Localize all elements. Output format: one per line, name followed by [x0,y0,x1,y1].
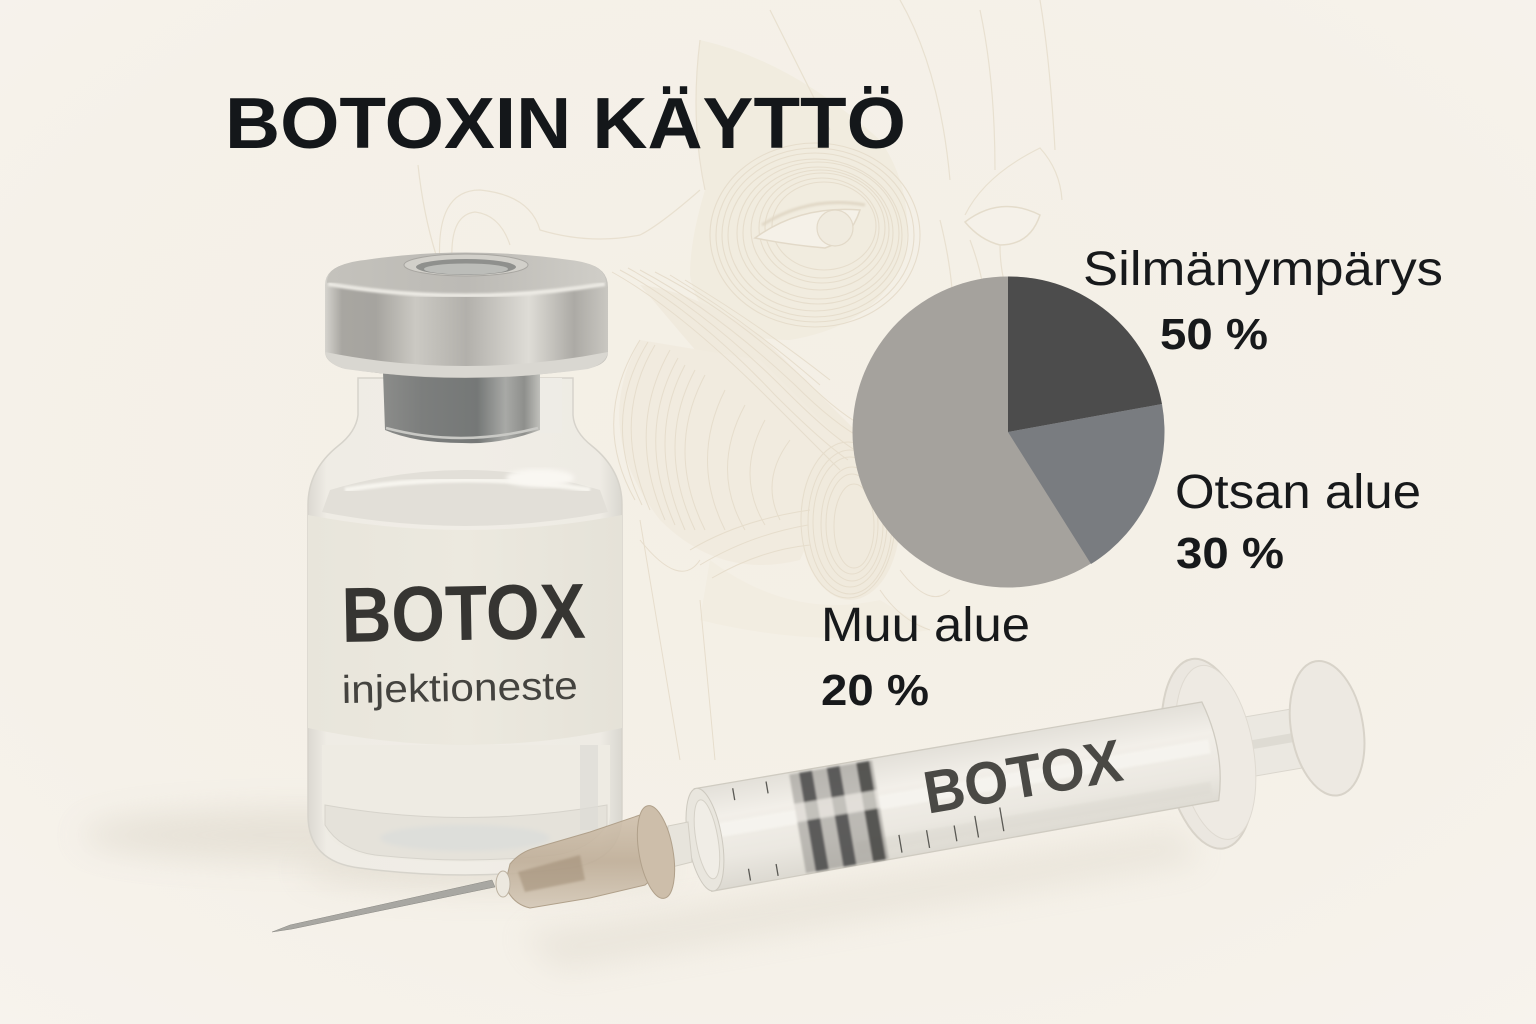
needle hub [496,803,681,908]
eye muscle rings [710,143,920,327]
label: Otsan alue 30 %: 30 % [1176,529,1284,578]
label: Otsan alue 30 % [1175,466,1421,578]
graduation marks [733,743,1005,881]
label text: injektioneste: injektioneste [341,665,578,712]
label [308,515,622,745]
label: Silmänympärys 50 %: Silmänympärys [1083,243,1443,296]
head outlines [418,165,445,280]
front rings [679,786,730,894]
label: Silmänympärys 50 % [1083,243,1443,359]
plunger rod [672,632,1380,937]
label: Muu alue 20 %: Muu alue [821,599,1030,652]
needle [272,880,495,932]
tip connector [668,822,692,868]
slice: Otsan alue [1008,404,1165,564]
syringe [272,632,1380,937]
cap opening [404,254,528,276]
right eye [965,206,1040,245]
label: Muu alue 20 %: 20 % [821,666,929,715]
stopper bands [789,760,889,873]
plunger disc [1280,655,1374,801]
label text: BOTOX: BOTOX [341,567,586,659]
shadows [80,809,1200,970]
slice: Silmänympärys [1008,276,1162,432]
glass body [308,378,622,875]
label: Silmänympärys 50 %: 50 % [1160,310,1268,359]
label: Muu alue 20 % [821,599,1030,715]
base glass [322,745,610,862]
pie chart [852,276,1165,588]
aluminium cap [325,253,608,378]
crimp [383,372,540,443]
faint anatomical face illustration [418,0,1062,760]
cheek muscle bands [612,268,950,760]
label: Otsan alue 30 %: Otsan alue [1175,466,1421,519]
syringe text: BOTOX: BOTOX [919,727,1127,827]
eye [755,209,860,248]
vial [308,252,622,875]
barrel [686,701,1227,893]
title: BOTOXIN KÄYTTÖ [225,84,906,164]
shoulder highlights [322,470,608,526]
finger flange [1148,652,1267,856]
